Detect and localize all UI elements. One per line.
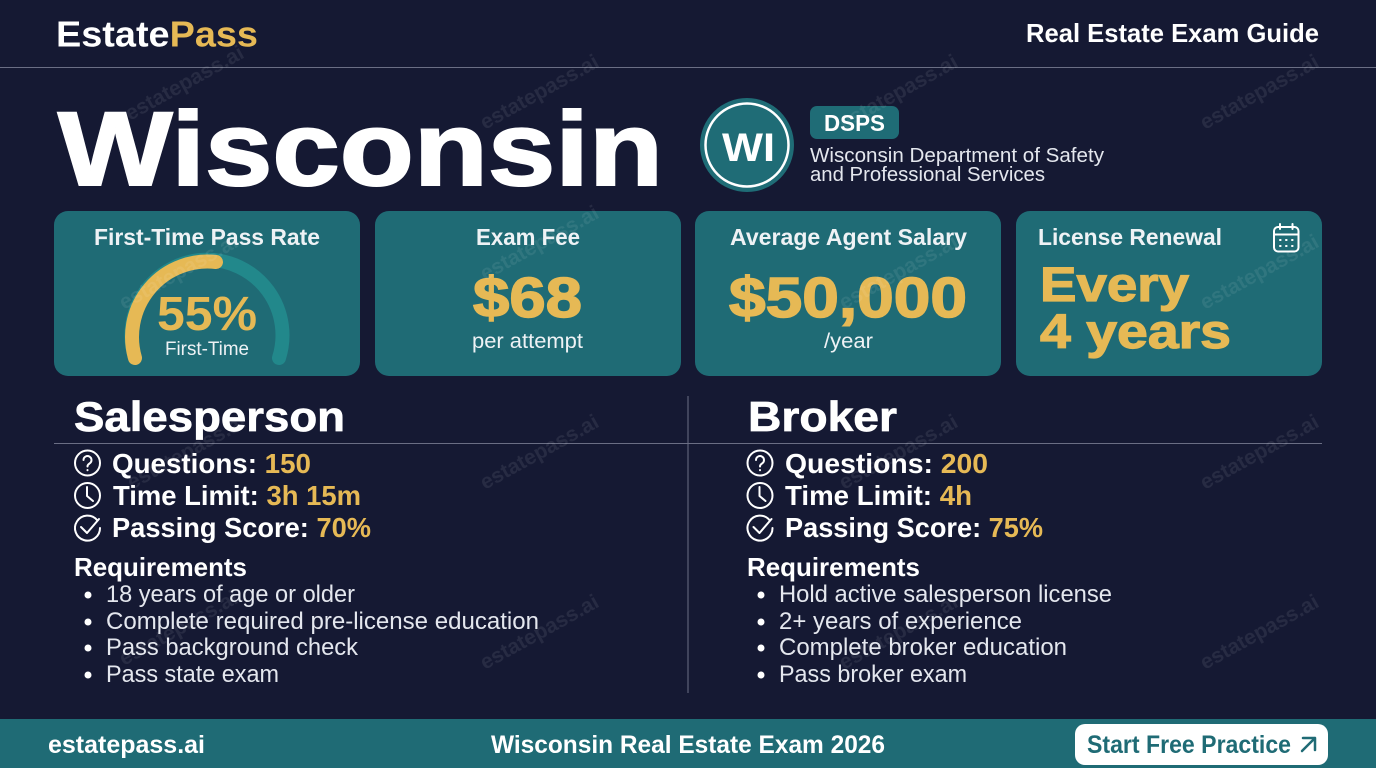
title: Wisconsin: Wisconsin [58, 91, 663, 208]
footer bar [0, 719, 1376, 768]
watermarks: estatepass.ai [115, 230, 242, 314]
panel: license renewal: License Renewal [1038, 224, 1222, 250]
requirements list: Requirements [74, 552, 247, 582]
stat: passing score: Passing Score: 70% [112, 512, 371, 543]
stat: passing score: Passing Score: 75% [785, 512, 1043, 543]
watermarks: estatepass.ai [115, 586, 242, 670]
footer site name: estatepass.ai [48, 731, 205, 759]
requirements list: Complete required pre-license education [106, 608, 539, 635]
watermarks: estatepass.ai [835, 230, 962, 314]
icon: arrow [1302, 738, 1315, 751]
requirements list: Complete broker education [779, 634, 1067, 661]
requirements list: 2+ years of experience [779, 608, 1022, 635]
watermarks: estatepass.ai [476, 410, 603, 494]
panel: broker [747, 393, 1112, 688]
requirements list: Hold active salesperson license [779, 581, 1112, 608]
footer title: Wisconsin Real Estate Exam 2026 [491, 731, 885, 759]
requirements list: Pass broker exam [779, 661, 967, 688]
requirements list [747, 552, 1112, 688]
panel: exam fee: per attempt [472, 330, 583, 353]
watermarks: estatepass.ai [476, 590, 603, 674]
panel: average agent salary [695, 211, 1001, 376]
header guide label: Real Estate Exam Guide [1026, 18, 1319, 48]
requirements list [74, 552, 539, 688]
icon: question [75, 450, 100, 476]
stat: time limit: Time Limit: 4h [785, 480, 972, 511]
stat: time limit: Time Limit: 3h 15m [113, 480, 361, 511]
agency pill: DSPS [824, 110, 885, 136]
state badge: WI: WI [722, 126, 775, 170]
panel: average agent salary: /year [824, 330, 873, 353]
panel: exam fee [375, 211, 681, 376]
button: start free practice [1075, 724, 1328, 765]
icon: check [75, 516, 100, 541]
watermarks [115, 41, 1323, 674]
panel: exam fee: $68 [473, 266, 582, 330]
watermarks: estatepass.ai [1196, 410, 1323, 494]
gauge chart [132, 260, 282, 360]
button: start free practice: Start Free Practice [1087, 731, 1291, 759]
watermarks: estatepass.ai [476, 50, 603, 134]
watermarks: estatepass.ai [1196, 590, 1323, 674]
panel: license renewal: Every [1040, 259, 1189, 312]
heading: broker: Broker [748, 393, 897, 440]
icon: calendar [1274, 224, 1298, 252]
panel: license renewal: 4 years [1040, 306, 1231, 359]
stat: questions: Questions: 150 [112, 448, 311, 479]
icon: check [748, 516, 773, 541]
icon: clock [75, 483, 100, 508]
stat: questions: Questions: 200 [785, 448, 988, 479]
header [56, 14, 1319, 54]
panel: average agent salary: Average Agent Salary [730, 224, 967, 250]
heading: salesperson: Salesperson [74, 393, 345, 440]
requirements list: Pass background check [106, 634, 359, 661]
panel: first-time pass rate [54, 211, 360, 376]
agency full name: and Professional Services [810, 164, 1045, 186]
requirements list: Requirements [747, 552, 920, 582]
watermarks: estatepass.ai [1196, 230, 1323, 314]
panel: first-time pass rate: First-Time Pass Rate [94, 224, 320, 250]
watermarks: estatepass.ai [1196, 50, 1323, 134]
agency: DSPS [810, 106, 1104, 186]
state badge: WI [700, 98, 794, 192]
watermarks: estatepass.ai [123, 410, 250, 494]
agency pill [810, 106, 899, 139]
icon: question [748, 450, 772, 476]
watermarks: estatepass.ai [121, 41, 248, 125]
logo: EstatePass: EstatePass [56, 14, 258, 54]
agency full name: Wisconsin Department of Safety [810, 145, 1104, 167]
requirements list: Pass state exam [106, 661, 279, 688]
gauge chart: 55% [157, 288, 257, 341]
watermarks: estatepass.ai [835, 50, 962, 134]
requirements list: 18 years of age or older [106, 581, 355, 608]
watermarks: estatepass.ai [835, 590, 962, 674]
watermarks: estatepass.ai [835, 410, 962, 494]
panel: salesperson [74, 393, 539, 688]
icon: clock [748, 483, 772, 508]
gauge chart: First-Time [165, 339, 249, 360]
watermarks: estatepass.ai [476, 201, 603, 285]
agency full name [810, 145, 1104, 186]
panel: average agent salary: $50,000 [729, 266, 967, 330]
panel: exam fee: Exam Fee [476, 224, 580, 250]
panel: license renewal [1016, 211, 1322, 376]
